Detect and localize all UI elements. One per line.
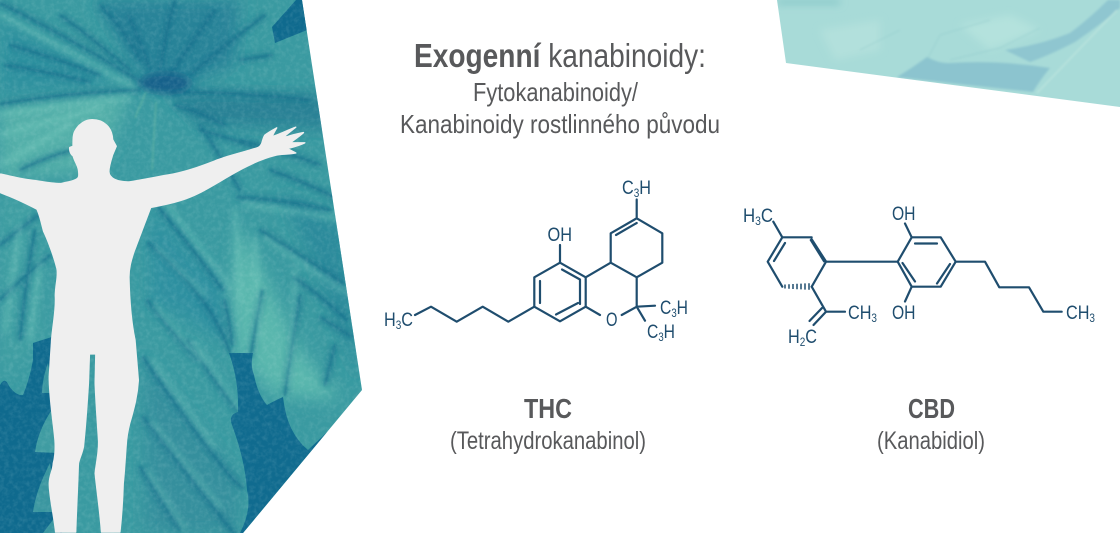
chart: THC molecule: H bbox=[677, 297, 688, 319]
chart: CBD molecule: H bbox=[743, 205, 757, 227]
leaf ridge shading bbox=[0, 0, 352, 533]
chart: THC molecule: H bbox=[639, 177, 651, 199]
chart: THC molecule: C bbox=[647, 321, 661, 343]
dark leaf hub bbox=[139, 73, 191, 93]
title bbox=[400, 37, 720, 139]
central leaf veins bbox=[135, 92, 156, 170]
dark gaps between leaves bbox=[0, 0, 340, 533]
chart: THC molecule: O bbox=[606, 309, 618, 331]
chart: CBD molecule: CH bbox=[848, 302, 876, 324]
label: CBD: (Kanabidiol) bbox=[877, 427, 985, 455]
chart: THC molecule: C bbox=[660, 297, 674, 319]
chart: THC molecule bbox=[384, 177, 688, 344]
chart: THC molecule: 3 bbox=[634, 186, 640, 200]
label: CBD: CBD bbox=[908, 393, 955, 424]
chart: CBD molecule: C bbox=[761, 205, 773, 227]
label: CBD bbox=[877, 393, 985, 455]
chart: CBD molecule: OH bbox=[892, 302, 916, 324]
chart: CBD molecule: CH bbox=[1066, 302, 1094, 324]
label: THC: (Tetrahydrokanabinol) bbox=[450, 427, 646, 455]
chart: CBD molecule: 2 bbox=[800, 335, 806, 349]
title: Kanabinoidy rostlinného původu bbox=[400, 109, 720, 139]
chart: THC molecule: 3 bbox=[658, 330, 664, 344]
title: Fytokanabinoidy/ bbox=[473, 77, 639, 107]
chart: THC molecule: C bbox=[622, 177, 636, 199]
human silhouette bbox=[1, 120, 305, 532]
chart: CBD molecule: H bbox=[788, 326, 802, 348]
chart: CBD molecule: OH bbox=[892, 203, 916, 225]
leaf highlights bbox=[0, 14, 345, 528]
chart: CBD molecule: C bbox=[805, 326, 817, 348]
label: THC: THC bbox=[524, 393, 572, 424]
leaf ridge lines bbox=[0, 0, 352, 533]
title: Exogenní kanabinoidy: bbox=[414, 37, 706, 74]
chart: THC molecule: OH bbox=[548, 224, 572, 246]
chart: CBD molecule: 3 bbox=[755, 214, 761, 228]
chart: CBD molecule bbox=[743, 203, 1095, 349]
chart: CBD molecule: 3 bbox=[871, 311, 877, 325]
chart: THC molecule: 3 bbox=[671, 306, 677, 320]
chart: THC molecule: H bbox=[664, 321, 675, 343]
panel: cannabis leaf photo bbox=[0, 0, 365, 533]
chart: THC molecule: 3 bbox=[396, 318, 402, 332]
chart: THC molecule: C bbox=[401, 309, 413, 331]
chart: THC molecule: H bbox=[384, 309, 398, 331]
label: THC bbox=[450, 393, 646, 455]
panel: pale leaf top right bbox=[775, 0, 1120, 108]
chart: CBD molecule: 3 bbox=[1089, 311, 1095, 325]
